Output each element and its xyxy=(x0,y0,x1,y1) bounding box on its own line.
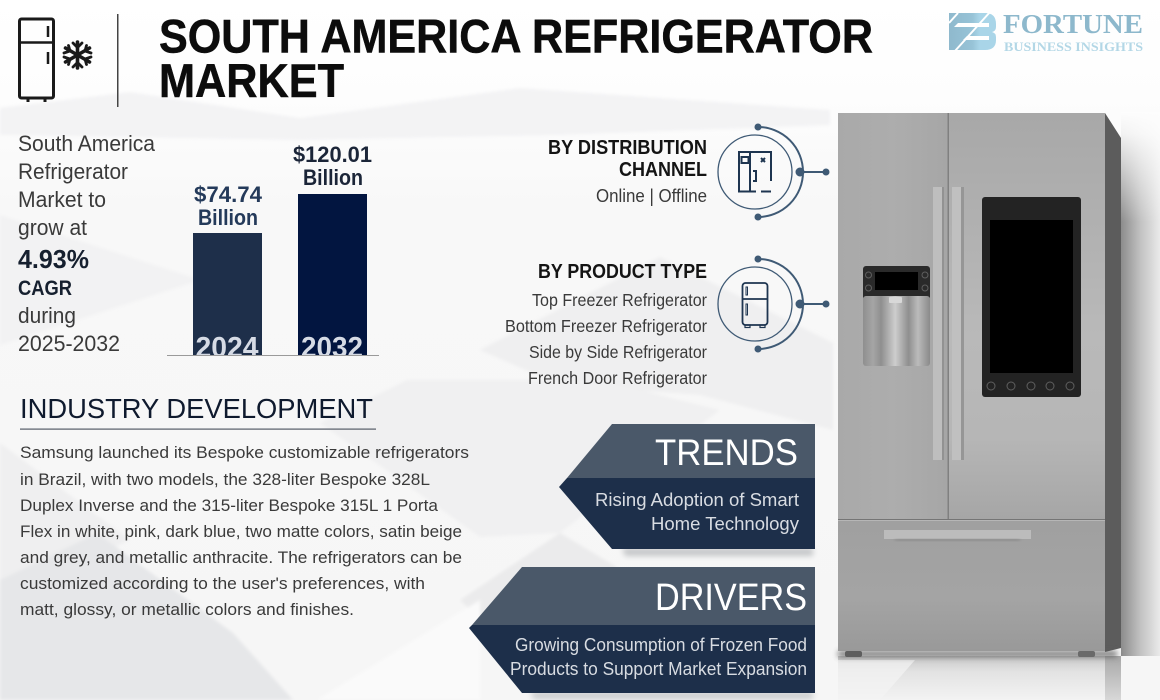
panel: drivers: Products to Support Market Expansion xyxy=(510,659,807,679)
segment: by product type: BY PRODUCT TYPE xyxy=(538,261,707,283)
door handles xyxy=(933,187,942,460)
right door xyxy=(949,113,1105,519)
text block: market growth: South America xyxy=(18,131,156,156)
bar value labels: Billion xyxy=(198,205,258,230)
text block: industry development: Flex in white, pink, dark blue, two matte colors, satin beige xyxy=(20,522,462,541)
segment: by distribution channel: CHANNEL xyxy=(619,159,707,181)
title xyxy=(159,10,873,107)
logo: Fortune Business Insights: BUSINESS INSIGHTS xyxy=(1004,39,1143,54)
logo: Fortune Business Insights: FORTUNE xyxy=(1003,9,1143,39)
bar value labels: Billion xyxy=(303,165,363,190)
logo: Fortune Business Insights xyxy=(949,9,1143,54)
panel: drivers: DRIVERS xyxy=(655,577,807,619)
text block: market growth: 2025-2032 xyxy=(18,331,120,356)
panel: trends xyxy=(559,424,815,556)
bar year labels: 2024 xyxy=(196,332,258,364)
bar year labels: 2032 xyxy=(301,332,363,364)
panel: trends: Home Technology xyxy=(651,514,799,534)
smart screen panel xyxy=(982,197,1081,397)
header divider xyxy=(117,14,118,107)
text block: industry development: Samsung launched its Bespoke customizable refrigerators xyxy=(20,443,469,462)
text block: industry development: and grey, and metallic anthracite. The refrigerators can be xyxy=(20,548,462,567)
text block: industry development: matt, glossy, or metallic colors and finishes. xyxy=(20,600,354,619)
cast shadow xyxy=(1121,113,1160,656)
panel: trends: Rising Adoption of Smart xyxy=(595,490,799,510)
text block: industry development xyxy=(20,443,469,619)
bar chart xyxy=(167,142,379,364)
text block: market growth: grow at xyxy=(18,215,87,240)
water dispenser xyxy=(863,266,930,300)
text block: industry development: Duplex Inverse and the 315-liter Bespoke 315L 1 Porta xyxy=(20,496,439,515)
text block: market growth: 4.93% xyxy=(18,244,89,274)
icon: refrigerator with snowflake xyxy=(20,19,91,102)
panel: trends: TRENDS xyxy=(655,432,798,473)
floor reflection xyxy=(838,656,1105,700)
refrigerator illustration xyxy=(838,112,1160,700)
segment: by product type: Top Freezer Refrigerator xyxy=(532,290,707,310)
segment: by product type: Side by Side Refrigerator xyxy=(529,342,707,362)
icon: side by side fridge circle xyxy=(718,124,829,220)
fridge feet xyxy=(845,651,862,657)
segment: by distribution channel: Online | Offline xyxy=(596,186,707,206)
text block: market growth: Refrigerator xyxy=(18,159,128,184)
segment: by product type: French Door Refrigerator xyxy=(528,368,707,388)
panel: drivers: Growing Consumption of Frozen Food xyxy=(515,635,807,655)
left door xyxy=(838,113,948,519)
bar 2024 xyxy=(193,233,262,355)
bar 2032 xyxy=(298,194,367,355)
icon: top freezer fridge circle xyxy=(718,256,829,352)
segment: by distribution channel xyxy=(548,137,707,206)
segment: by distribution channel: BY DISTRIBUTION xyxy=(548,137,707,159)
text block: market growth xyxy=(18,131,156,356)
bar value labels: $120.01 xyxy=(293,142,372,167)
text block: industry development: customized according to the user's preferences, with xyxy=(20,574,425,593)
title: SOUTH AMERICA REFRIGERATOR xyxy=(159,10,873,62)
bar year labels xyxy=(196,336,362,355)
fridge side xyxy=(1105,113,1121,652)
drawer xyxy=(838,521,1105,651)
text block: market growth: Market to xyxy=(18,187,106,212)
segment: by product type xyxy=(505,261,707,388)
bar value labels: $74.74 xyxy=(194,182,263,207)
title: MARKET xyxy=(159,54,344,107)
text block: industry development: in Brazil, with two models, the 328-liter Bespoke 328L xyxy=(20,470,430,489)
panel: drivers xyxy=(469,567,815,699)
heading: industry development: INDUSTRY DEVELOPMENT xyxy=(20,393,373,424)
text block: market growth: CAGR xyxy=(18,277,72,300)
text block: market growth: during xyxy=(18,303,76,328)
bar value labels xyxy=(194,142,372,230)
drawer handle xyxy=(884,530,1031,539)
segment: by product type: Bottom Freezer Refrigerator xyxy=(505,316,707,336)
